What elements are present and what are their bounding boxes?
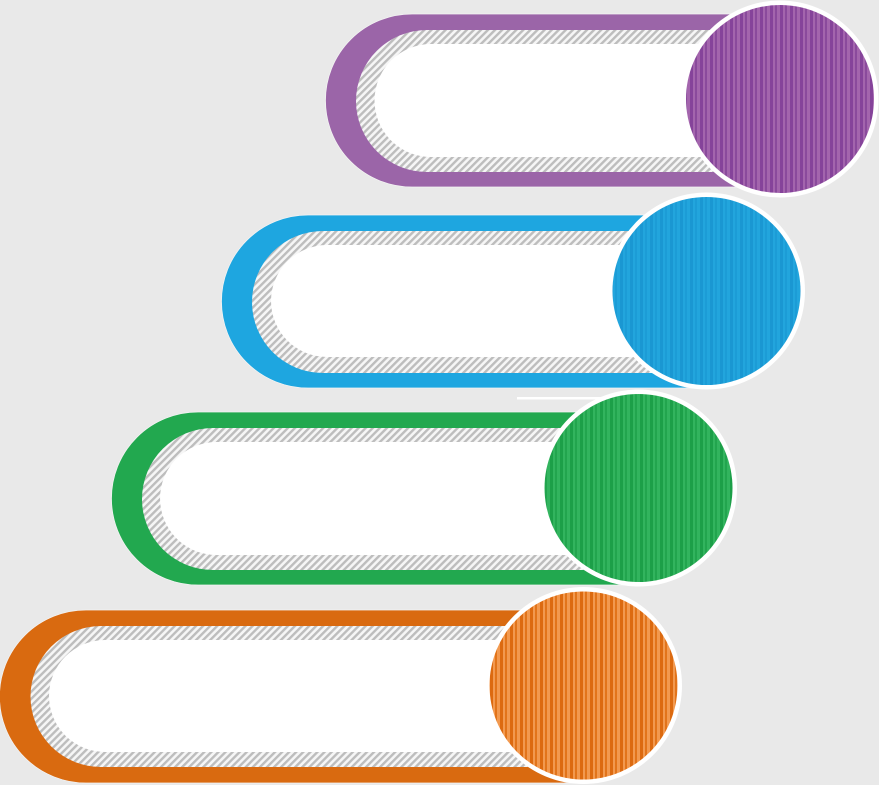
- blue circle: [608, 192, 805, 390]
- purple circle: [682, 0, 878, 198]
- green circle: [540, 390, 737, 586]
- purple hatched band: [356, 30, 780, 172]
- thin white line: [517, 397, 607, 400]
- purple pill: [326, 14, 780, 187]
- orange white label area: [49, 640, 583, 752]
- banner: purple: [326, 0, 878, 198]
- green hatched band: [142, 428, 638, 570]
- blue pill: [221, 215, 706, 388]
- banner: blue: [221, 192, 805, 390]
- orange circle: [485, 587, 682, 784]
- green white label area: [160, 442, 638, 555]
- orange pill: [0, 610, 583, 783]
- purple white label area: [374, 44, 780, 157]
- green pill: [111, 412, 638, 585]
- blue hatched band: [252, 231, 706, 373]
- blue white label area: [271, 245, 706, 357]
- banner: orange: [0, 587, 682, 784]
- orange hatched band: [30, 626, 583, 767]
- banner: green: [111, 390, 737, 586]
